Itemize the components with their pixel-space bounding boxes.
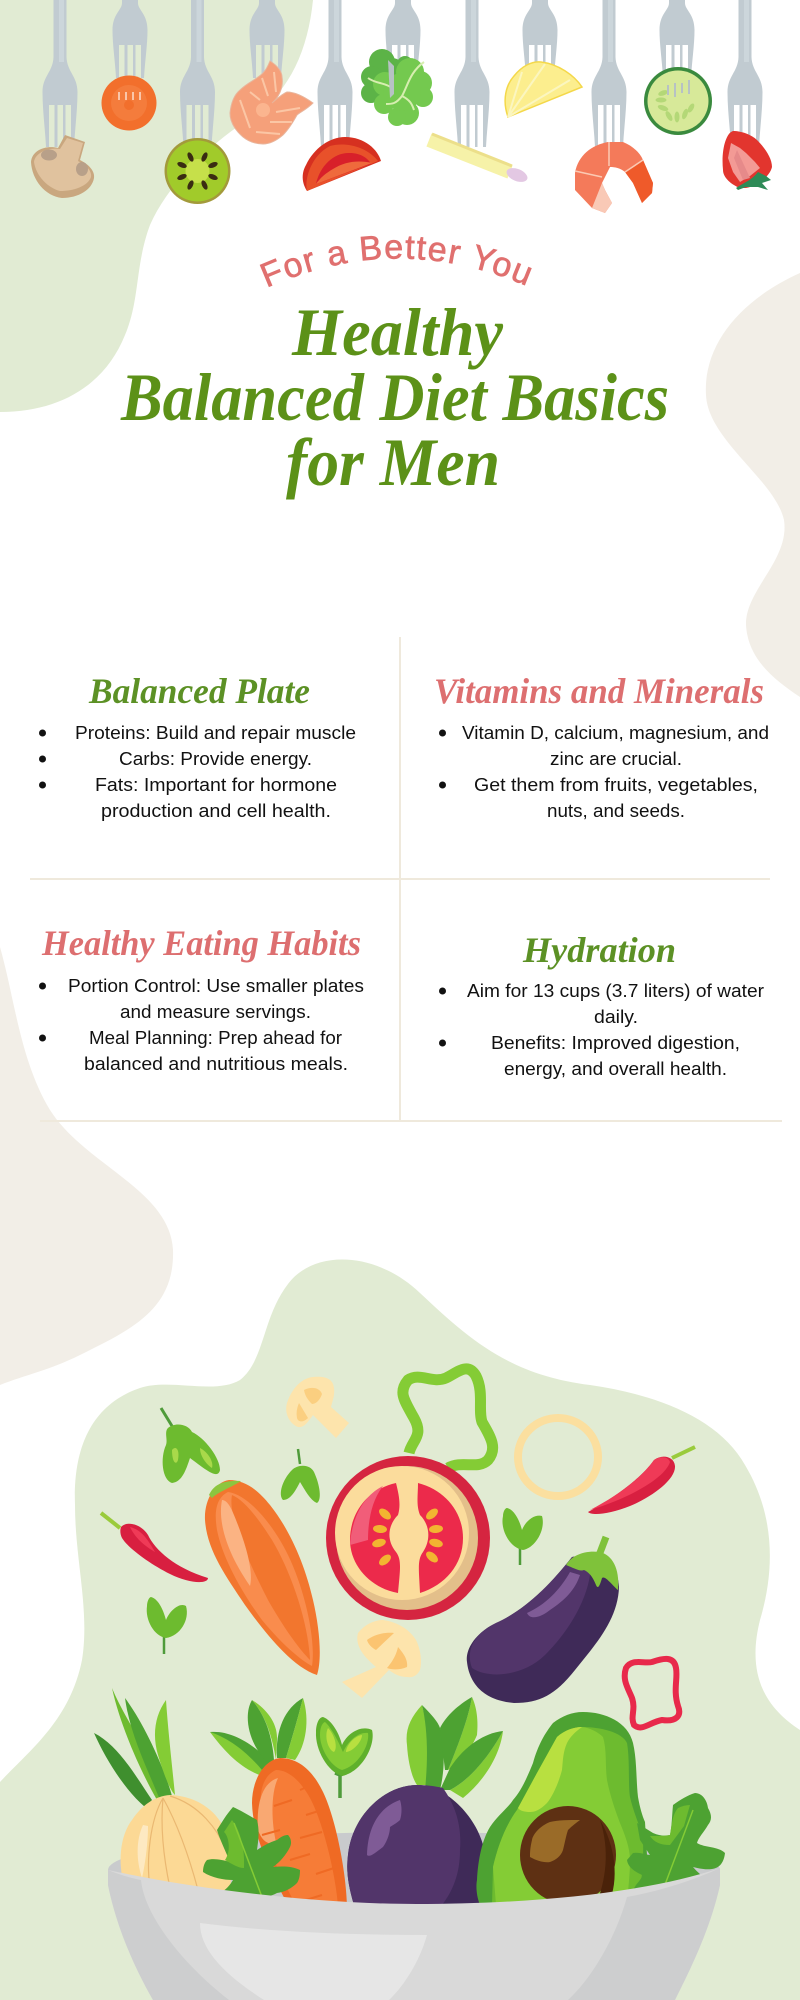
- icon: arugula right: [627, 1793, 725, 1896]
- icon: salmon on fork: [230, 61, 313, 144]
- list: balanced plate: production and cell health.: [101, 801, 331, 821]
- title: Balanced Diet Basics: [120, 359, 669, 435]
- icon: green leaf 3: [502, 1508, 543, 1565]
- icon: onion ring: [518, 1418, 598, 1496]
- background blob: bottom green: [0, 1260, 800, 2000]
- list: balanced plate: Proteins: Build and repair muscle: [75, 723, 356, 743]
- icon: flying carrot: [205, 1480, 320, 1675]
- list: vitamins and minerals: Vitamin D, calcium, magnesium, and: [462, 723, 769, 743]
- list: hydration: [439, 981, 764, 1079]
- icon: arugula left: [203, 1807, 300, 1898]
- panel: hydration: [439, 930, 764, 1079]
- row of hanging forks: [42, 0, 762, 147]
- icon: onion with greens: [94, 1688, 231, 1892]
- list: vitamins and minerals: [439, 723, 769, 821]
- icon: purple onion: [347, 1785, 487, 1905]
- icon: kiwi slice on fork: [164, 138, 230, 204]
- heading: vitamins and minerals: Vitamins and Minerals: [434, 671, 764, 711]
- icon: red chili right: [588, 1447, 695, 1514]
- curved tagline: For a Better You: [260, 236, 532, 288]
- icon: tomato wedge on fork: [303, 137, 381, 191]
- list: healthy eating habits: and measure servings.: [120, 1002, 311, 1022]
- icon: green leaf 1: [161, 1408, 220, 1483]
- panel: balanced plate: [39, 671, 356, 821]
- icon: leaf sprig center: [316, 1717, 373, 1798]
- list: healthy eating habits: Portion Control: Use smaller plates: [68, 976, 364, 996]
- list: vitamins and minerals: Get them from fruits, vegetables,: [474, 775, 758, 795]
- background blob: top-left green: [0, 0, 313, 412]
- icon: red pepper ring: [625, 1659, 679, 1727]
- icon: carrot slice on fork: [102, 76, 156, 130]
- heading: hydration: Hydration: [522, 930, 676, 970]
- icon: halved tomato: [326, 1456, 490, 1620]
- icon: red chili left: [101, 1513, 208, 1582]
- heading: balanced plate: Balanced Plate: [88, 671, 310, 711]
- title: for Men: [286, 424, 500, 500]
- icon: lettuce on fork: [361, 49, 433, 126]
- title: [120, 294, 669, 500]
- icon: eggplant: [467, 1537, 619, 1703]
- icon: mushroom small: [286, 1377, 349, 1438]
- list: healthy eating habits: Meal Planning: Prep ahead for: [89, 1028, 342, 1048]
- icon: mushroom large: [342, 1620, 421, 1698]
- background blob: right beige: [706, 273, 800, 697]
- list: healthy eating habits: [39, 976, 364, 1074]
- panel: vitamins and minerals: [434, 671, 769, 821]
- illustration: falling vegetables: [101, 1369, 695, 1727]
- list: vitamins and minerals: nuts, and seeds.: [547, 801, 685, 821]
- icon: shrimp on fork: [575, 142, 653, 213]
- background blob: left beige: [0, 947, 173, 1385]
- list: vitamins and minerals: zinc are crucial.: [550, 749, 682, 769]
- icon: strawberry on fork: [723, 131, 772, 190]
- icon: bowl front: [108, 1868, 720, 2000]
- list: balanced plate: Carbs: Provide energy.: [119, 749, 312, 769]
- grid lines: [30, 637, 782, 1121]
- icon: lemon wedge on fork: [505, 62, 582, 117]
- heading: healthy eating habits: Healthy Eating Habits: [41, 923, 361, 963]
- illustration: bowl of vegetables: [94, 1688, 725, 2000]
- title: Healthy: [291, 294, 504, 370]
- icon: green leaf 2: [281, 1449, 320, 1503]
- icon: green leaf 4: [147, 1597, 187, 1654]
- list: hydration: daily.: [594, 1007, 638, 1027]
- icon: purple onion greens: [407, 1697, 503, 1798]
- list: healthy eating habits: balanced and nutritious meals.: [84, 1054, 348, 1074]
- panel: healthy eating habits: [39, 923, 364, 1074]
- icon: green pepper ring: [403, 1369, 493, 1468]
- list: balanced plate: Fats: Important for hormone: [95, 775, 337, 795]
- list: balanced plate: [39, 723, 356, 821]
- list: hydration: Aim for 13 cups (3.7 liters) of water: [467, 981, 764, 1001]
- icon: cucumber slice on fork: [644, 67, 712, 135]
- icon: carrot in bowl: [252, 1758, 347, 1905]
- icon: mushroom on fork: [31, 135, 94, 198]
- icon: carrot greens: [210, 1698, 306, 1776]
- list: hydration: energy, and overall health.: [504, 1059, 727, 1079]
- bowl back rim: [108, 1832, 720, 1908]
- list: hydration: Benefits: Improved digestion,: [491, 1033, 740, 1053]
- icon: asparagus on fork: [429, 134, 529, 185]
- icon: avocado: [476, 1712, 650, 1905]
